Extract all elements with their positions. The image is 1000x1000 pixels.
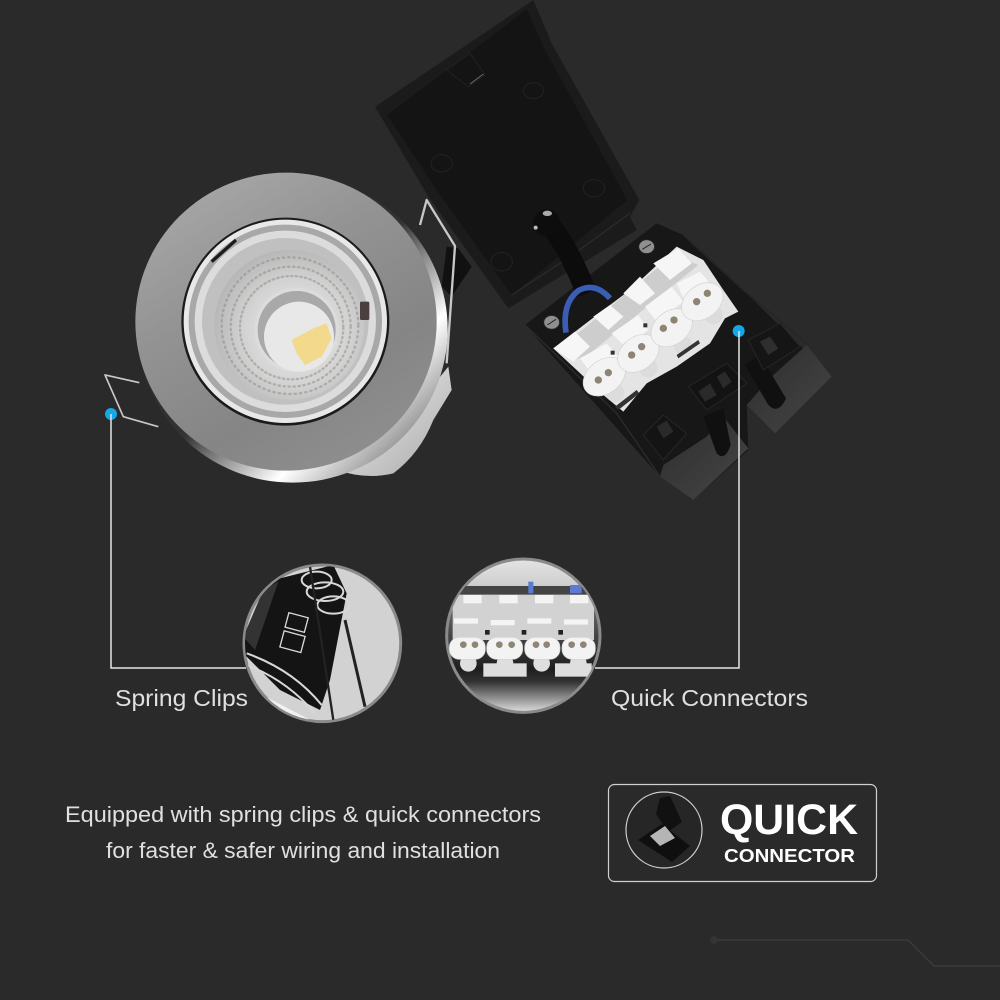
white rear housing xyxy=(337,367,452,476)
blue marker dot: spring clips xyxy=(105,408,117,420)
inset circle: quick connector detail xyxy=(447,559,600,712)
leader line: spring clips xyxy=(111,414,246,668)
badge icon xyxy=(626,792,702,868)
blue wire xyxy=(565,288,610,333)
terminal screws xyxy=(544,240,655,329)
label: Quick Connectors: Quick Connectors xyxy=(611,685,808,711)
badge word CONNECTOR: CONNECTOR xyxy=(724,846,855,866)
mains cable and grommet xyxy=(533,209,587,293)
box lid xyxy=(375,0,639,308)
leader line: quick connectors xyxy=(595,331,739,668)
flange face xyxy=(135,173,437,471)
blue marker dot: quick connectors xyxy=(733,325,745,337)
white quick connector block xyxy=(553,247,738,412)
spring clip right wire xyxy=(420,200,455,363)
quick connector badge xyxy=(608,784,876,882)
description text xyxy=(65,802,541,863)
spring clip left wire xyxy=(105,375,158,427)
description text: for faster & safer wiring and installation xyxy=(106,838,500,863)
product photo: downlight xyxy=(105,173,472,483)
chrome flange edge xyxy=(138,176,448,483)
decorative footer circuit line xyxy=(710,936,1000,966)
description text: Equipped with spring clips & quick connectors xyxy=(65,802,541,827)
box feet and cable clamps xyxy=(643,323,832,500)
product photo: junction box xyxy=(375,0,832,500)
badge word QUICK: QUICK xyxy=(720,796,858,844)
lens assembly xyxy=(181,218,389,426)
label: Spring Clips: Spring Clips xyxy=(115,685,248,711)
box base xyxy=(525,223,832,500)
inset circle: spring clip detail xyxy=(240,565,401,727)
cable behind lamp xyxy=(442,247,472,297)
